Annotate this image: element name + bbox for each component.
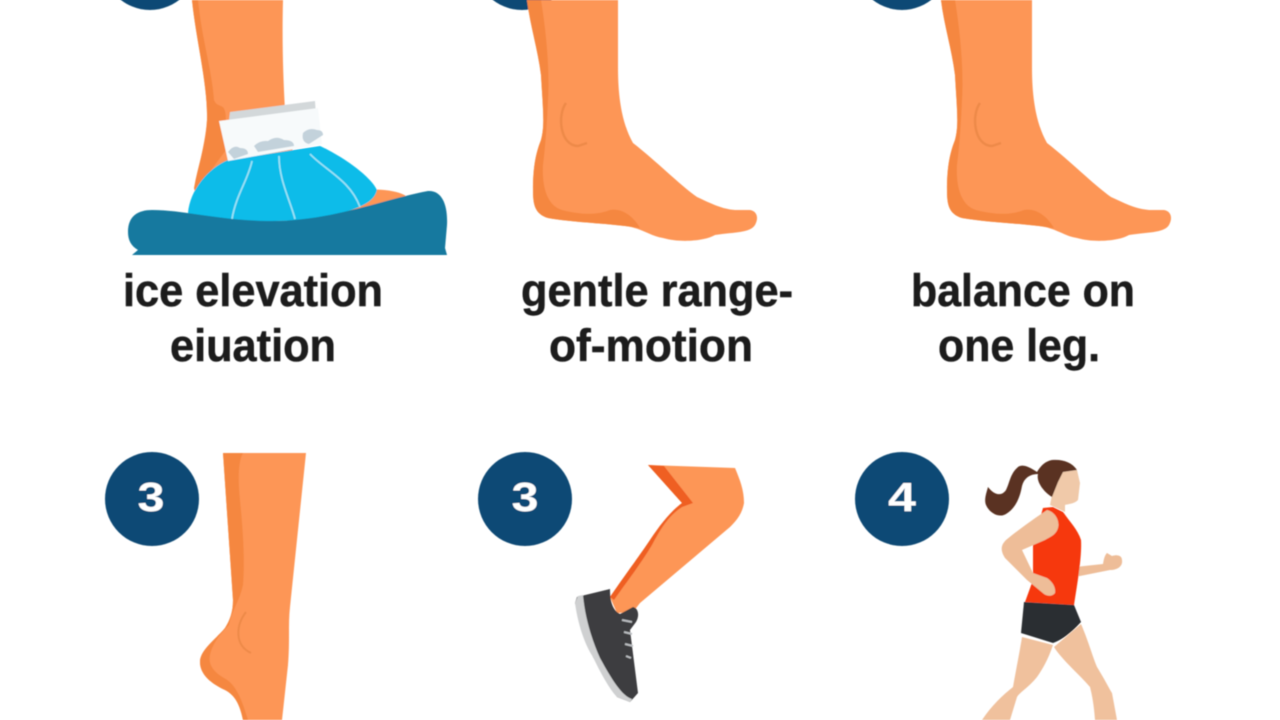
panel: leg swing step: [478, 452, 744, 702]
illustration: ice pack: [188, 101, 377, 221]
neck and face: [1050, 470, 1080, 512]
panel: jogging step: [855, 452, 1122, 720]
panel: balance on one leg step: [855, 0, 1171, 371]
front leg: [982, 637, 1053, 720]
illustration: leg behind ice pack: [192, 0, 406, 215]
back leg: [1054, 624, 1117, 720]
number badge: top middle (cropped): [475, 0, 569, 10]
illustration: cushion: [128, 191, 447, 255]
illustration: jogging woman: [982, 460, 1122, 720]
illustration: sneaker: [575, 589, 638, 702]
caption: gentle range-of-motion: [521, 265, 793, 371]
panel: ice elevation step: [103, 0, 447, 371]
number badge: 3: 3: [138, 474, 164, 520]
illustration: raised heel leg: [200, 453, 306, 720]
caption: gentle range-of-motion: gentle range-: [521, 265, 793, 316]
illustration: foot side view: [527, 0, 757, 241]
caption: gentle range-of-motion: of-motion: [549, 320, 753, 371]
number badge: 4: [855, 452, 949, 546]
tank top: [1025, 507, 1081, 605]
near arm: [1002, 510, 1059, 596]
caption: balance on one leg: balance on: [911, 265, 1135, 316]
number badge: top left (cropped): [103, 0, 197, 10]
illustration: foot side view: [941, 0, 1171, 241]
caption: balance on one leg: one leg.: [938, 320, 1100, 371]
number badge: top right (cropped): [855, 0, 949, 10]
far arm: [1075, 553, 1122, 577]
caption: ice elevation: [123, 265, 383, 371]
shorts: [1021, 602, 1081, 643]
number badge: 3: [478, 452, 572, 546]
caption: ice elevation: ice elevation: [123, 265, 383, 316]
number badge: 3: [105, 452, 199, 546]
panel: heel raise step: [105, 452, 306, 720]
caption: ice elevation: eiuation: [170, 320, 336, 371]
number badge: 4: 4: [888, 474, 916, 520]
panel: gentle range-of-motion step: [475, 0, 793, 371]
hair and ponytail: [985, 460, 1077, 516]
number badge: 3: 3: [512, 474, 538, 520]
caption: balance on one leg: [911, 265, 1135, 371]
illustration: bent leg with sneaker: [575, 465, 744, 702]
